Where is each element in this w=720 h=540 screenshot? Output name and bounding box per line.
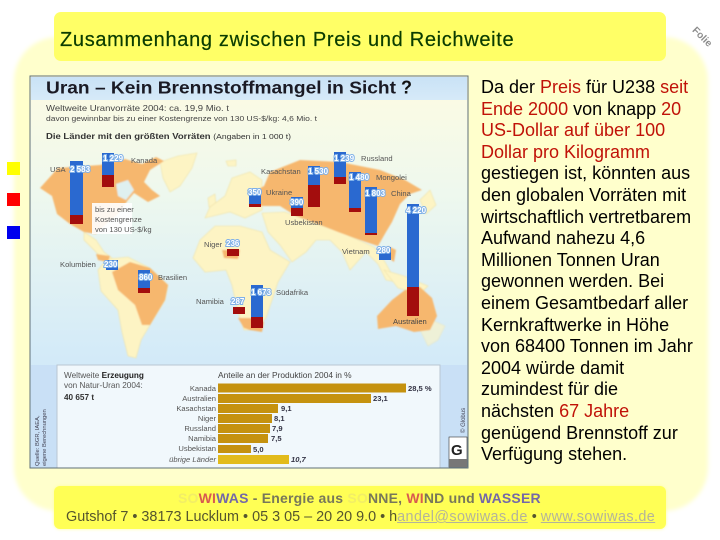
chart values: 7,9: [272, 424, 283, 433]
reserve values: 1 673: [251, 288, 272, 297]
source strip: [31, 365, 57, 468]
reserve values: 1 229: [103, 154, 124, 163]
body text: [481, 77, 693, 464]
body text: zumindest für die: [481, 379, 618, 399]
note box: bis zu einer: [95, 205, 134, 214]
production summary: Weltweite Erzeugung: [64, 371, 144, 380]
reserve values: 350: [248, 188, 262, 197]
body text: gestiegen ist, könnten aus: [481, 163, 690, 183]
chart category labels: Niger: [198, 414, 216, 423]
chart values: 5,0: [253, 445, 264, 454]
chart values: 8,1: [274, 414, 285, 423]
chart category labels: Australien: [182, 394, 216, 403]
country labels: Kasachstan: [261, 167, 301, 176]
body text: Dollar pro Kilogramm: [481, 142, 650, 162]
source strip: eigene Berechnungen: [42, 409, 48, 466]
country labels: Südafrika: [276, 288, 309, 297]
chart values: 23,1: [373, 394, 389, 403]
reserve values: [70, 154, 427, 306]
body text: Millionen Tonnen Uran: [481, 250, 660, 270]
chart category labels: Kasachstan: [176, 404, 216, 413]
reserve values: 390: [290, 198, 304, 207]
chart category labels: Namibia: [188, 434, 217, 443]
body text: Aufwand nahezu 4,6: [481, 228, 645, 248]
chart values: 7,5: [271, 434, 282, 443]
reserve values: 2 583: [70, 165, 91, 174]
reserve values: 1 239: [334, 154, 355, 163]
chart values: [253, 384, 432, 464]
land masses: [40, 153, 445, 358]
note box: [92, 203, 152, 234]
country labels: Kolumbien: [60, 260, 96, 269]
bars: [70, 152, 419, 328]
reserve values: 236: [226, 239, 240, 248]
reserve values: 4 220: [406, 206, 427, 215]
country labels: USA: [50, 165, 67, 174]
reserve values: 860: [139, 273, 153, 282]
country labels: Niger: [204, 240, 223, 249]
chart category labels: übrige Länder: [169, 455, 216, 464]
body text: wirtschaftlich vertretbarem: [481, 207, 691, 227]
slide number label: Folie: Folie: [690, 25, 714, 49]
title bar: [54, 12, 666, 61]
note box: von 130 US-$/kg: [95, 225, 152, 234]
image heading: Uran – Kein Brennstoffmangel in Sicht: [46, 78, 396, 98]
production chart: [57, 365, 440, 468]
right credit strip: © Globus: [460, 408, 467, 433]
legend square: red: [7, 193, 20, 206]
reserve values: 280: [377, 246, 391, 255]
source strip: Quelle: BGR, IAEA,: [35, 415, 41, 466]
country labels: Namibia: [196, 297, 225, 306]
body text: genügend Brennstoff zur: [481, 422, 678, 442]
chart values: 9,1: [281, 404, 292, 413]
country labels: [50, 154, 427, 326]
reserve values: 230: [104, 260, 118, 269]
right credit strip: G: [451, 442, 463, 459]
body text: Verfügung stehen.: [481, 444, 627, 464]
chart values: 28,5 %: [408, 384, 432, 393]
chart category labels: [169, 384, 217, 464]
land: pale continents: [84, 153, 445, 358]
reserve values: 1 480: [349, 173, 370, 182]
chart bars: [218, 384, 406, 464]
body text: den globalen Vorräten mit: [481, 185, 686, 205]
country labels: Mongolei: [376, 173, 407, 182]
body text: Da der Preis für U238 seit: [481, 77, 688, 97]
footer contact line: Gutshof 7 • 38173 Lucklum • 05 3 05 – 20 20 9.0 • handel@sowiwas.de • www.sowiwas.de: [66, 509, 655, 525]
body text: Kernkraftwerke in Höhe: [481, 315, 669, 335]
right credit strip: [440, 365, 467, 468]
body text: von 68400 Tonnen im Jahr: [481, 336, 693, 356]
body text: einem Gesamtbedarf aller: [481, 293, 688, 313]
country labels: Australien: [393, 317, 427, 326]
water: Hudson Bay: [116, 180, 134, 200]
reserves summary: davon gewinnbar bis zu einer Kostengrenze von 130 US-$/kg: 4,6 Mio. t: [46, 114, 317, 123]
body text: US-Dollar auf über 100: [481, 120, 665, 140]
country labels: Usbekistan: [285, 218, 323, 227]
chart values: 10,7: [291, 455, 307, 464]
reserve values: 287: [231, 297, 245, 306]
chart heading: Anteile an der Produktion 2004 in %: [218, 370, 352, 380]
body text: gewonnen werden. Bei: [481, 271, 664, 291]
reserve values: 1 803: [365, 189, 386, 198]
reserves summary: Die Länder mit den größten Vorräten (Angaben in 1 000 t): [46, 132, 291, 141]
chart category labels: Russland: [184, 424, 216, 433]
production summary: von Natur-Uran 2004:: [64, 381, 143, 390]
footer slogan: SOWIWAS - Energie aus SONNE, WIND und WASSER: [178, 490, 541, 506]
map background: [30, 76, 468, 468]
country labels: Ukraine: [266, 188, 292, 197]
body text: 2004 würde damit: [481, 358, 624, 378]
legend square: blue: [7, 226, 20, 239]
body text: nächsten 67 Jahre: [481, 401, 629, 421]
reserves summary: Weltweite Uranvorräte 2004: ca. 19,9 Mio. t: [46, 103, 230, 113]
country labels: Brasilien: [158, 273, 187, 282]
reserve values: 1 530: [308, 167, 329, 176]
question mark: ?: [401, 78, 412, 98]
chart category labels: Kanada: [190, 384, 217, 393]
body text: Ende 2000 von knapp 20: [481, 99, 681, 119]
country labels: Kanada: [131, 156, 158, 165]
country labels: Russland: [361, 154, 393, 163]
country labels: Vietnam: [342, 247, 370, 256]
country labels: China: [391, 189, 412, 198]
note box: Kostengrenze: [95, 215, 142, 224]
footer bar: [54, 486, 666, 529]
reserves summary: [46, 103, 317, 141]
chart category labels: Usbekistan: [178, 444, 216, 453]
header band: [31, 77, 467, 100]
title: Zusammenhang zwischen Preis und Reichweite: [60, 29, 514, 51]
production summary: 40 657 t: [64, 393, 94, 402]
legend square: yellow: [7, 162, 20, 175]
land: orange resource countries: [40, 157, 437, 332]
